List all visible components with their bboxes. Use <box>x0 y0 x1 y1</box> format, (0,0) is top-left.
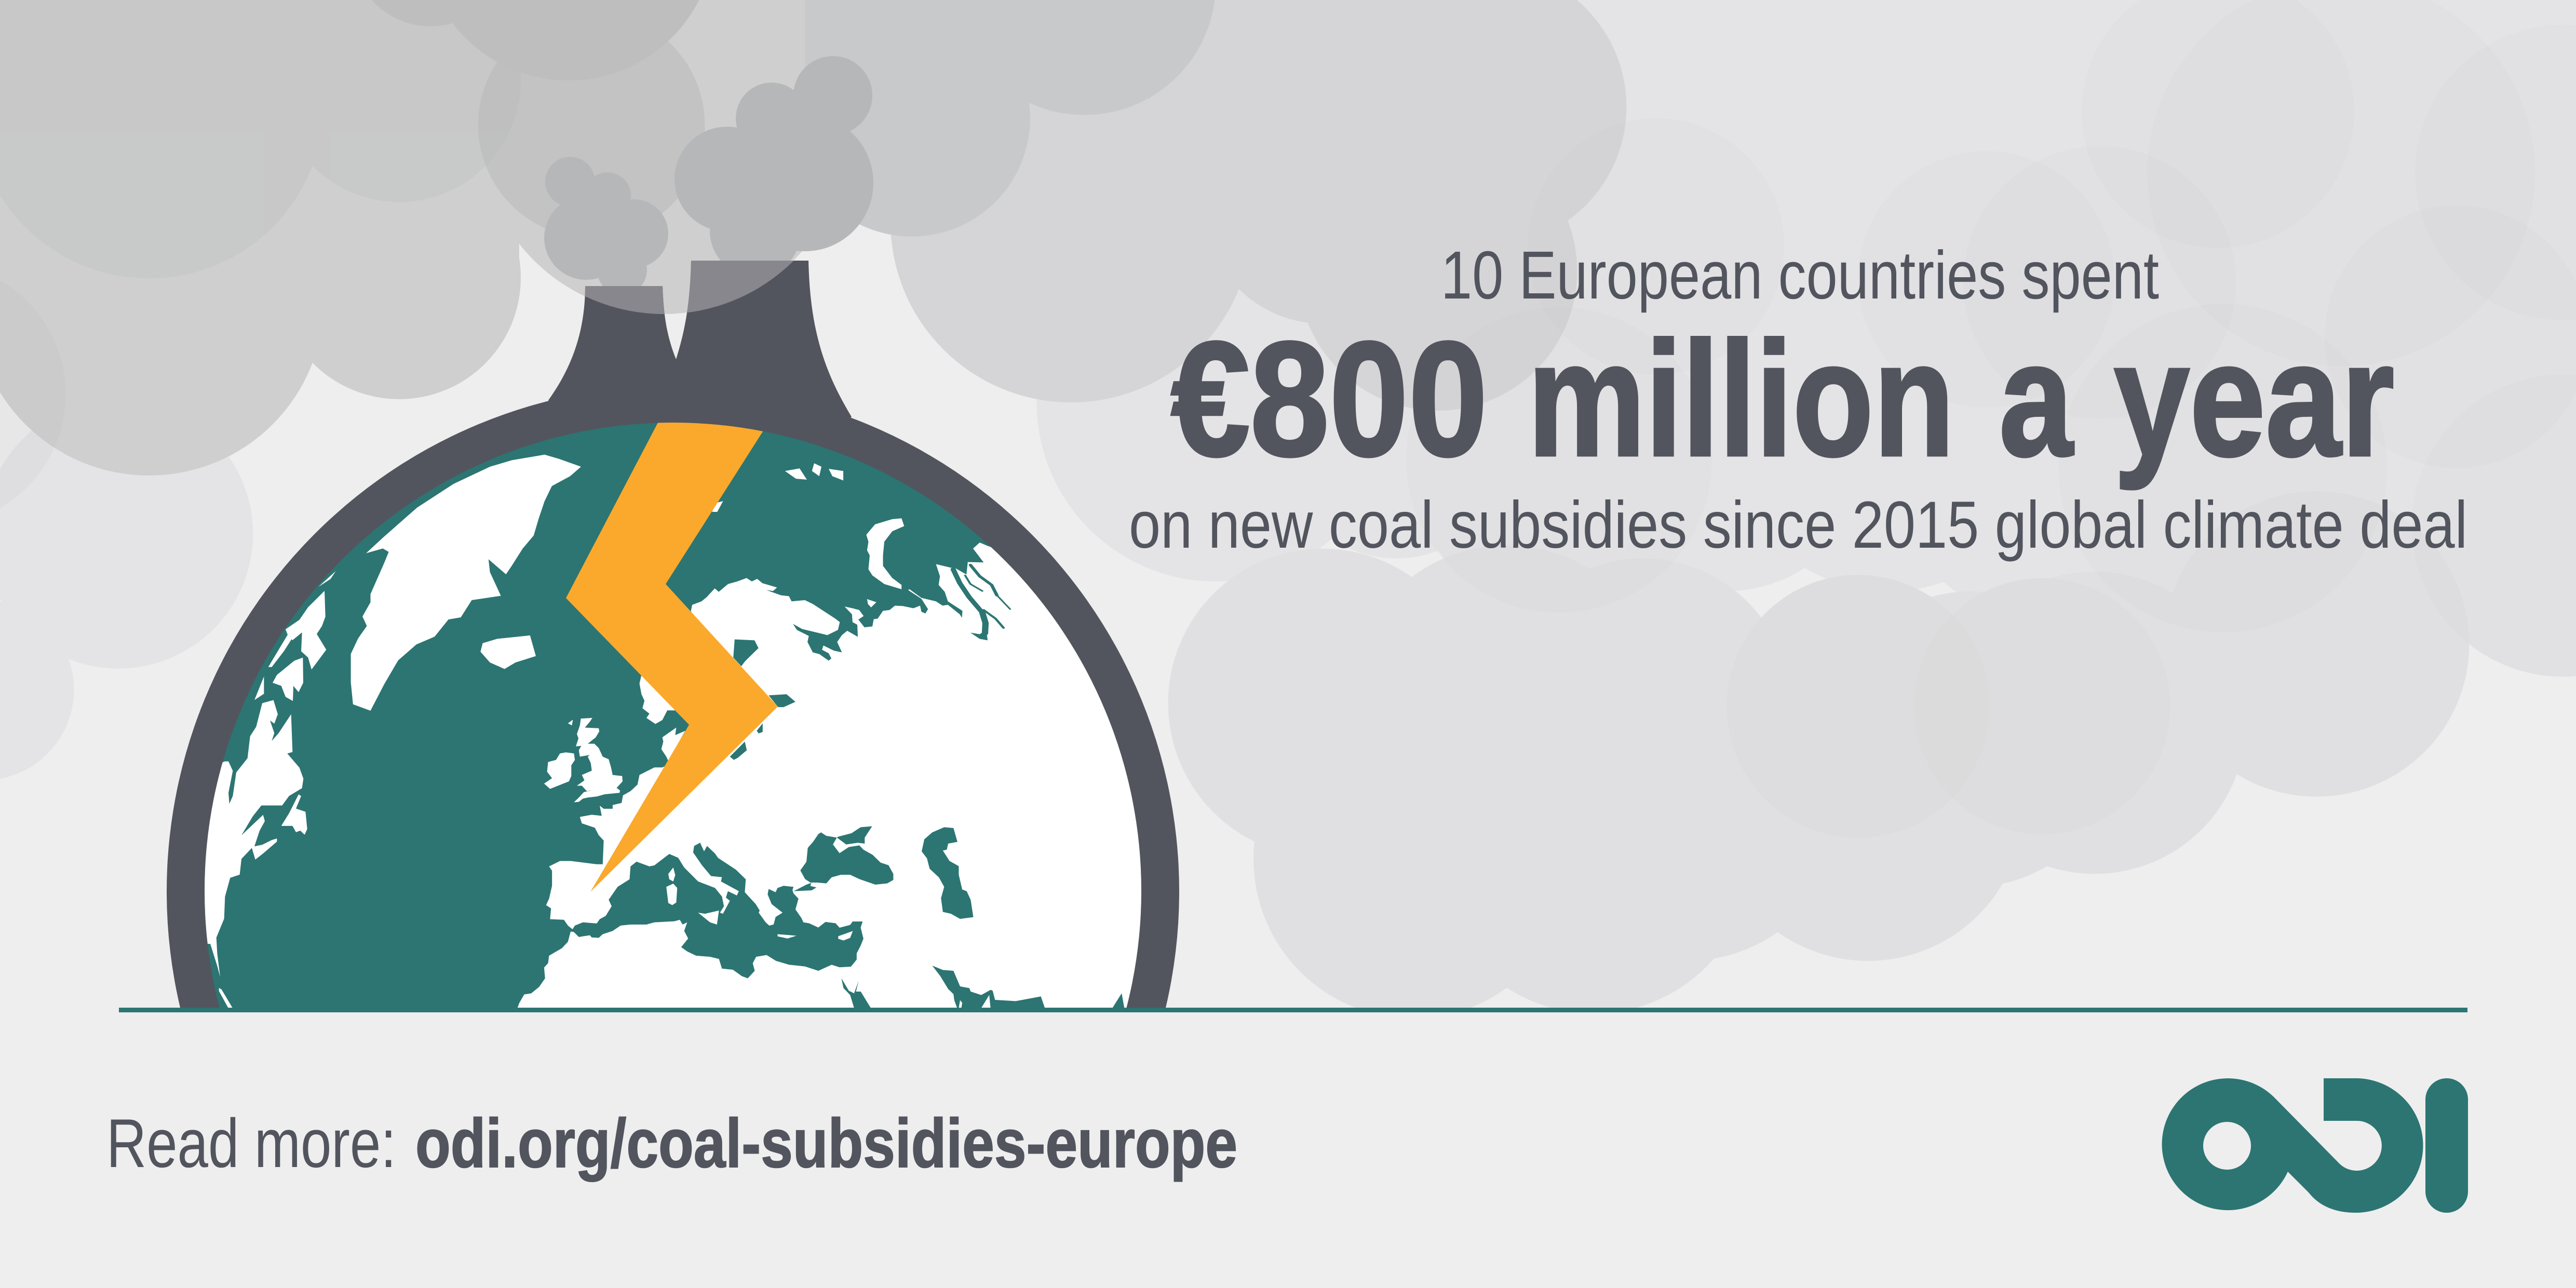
smoke puffs from chimneys <box>544 56 873 295</box>
western europe and africa <box>514 675 1076 1019</box>
pale cloud lower left <box>0 399 253 780</box>
upper left smoke cloud <box>0 0 521 278</box>
read more link text: odi.org/coal-subsidies-europe <box>415 1105 1237 1182</box>
northern eurasia <box>691 518 1258 1012</box>
lightning bolt crack <box>566 414 778 892</box>
baltic sea pieces <box>768 694 795 707</box>
ground line <box>119 1008 2467 1012</box>
mid grey chimney cloud lobe <box>478 42 705 228</box>
black sea, caspian sea, red sea and gulf <box>794 826 1124 1012</box>
top centre dark lobes <box>859 0 1215 237</box>
centre top cloud <box>887 0 1626 411</box>
lower left smoke cloud <box>0 0 805 476</box>
headline text block <box>1129 237 2467 562</box>
read more link text <box>106 1105 1237 1182</box>
line one: 10 European countries spent <box>1441 237 2159 313</box>
darkest top lobes <box>372 0 699 62</box>
headline figure: a <box>1999 308 2074 490</box>
headline figure: year <box>2114 308 2394 491</box>
mediterranean sea <box>571 843 864 978</box>
power station cooling towers and globe ring <box>167 261 1179 1008</box>
globe map <box>197 414 1258 1019</box>
siberian gulfs and rivers <box>953 565 1010 633</box>
mediterranean islands <box>666 867 797 939</box>
smoke clouds <box>0 0 2576 1019</box>
headline figure <box>1171 308 2394 491</box>
greenland and iceland <box>351 455 843 711</box>
british isles <box>574 718 623 802</box>
headline figure: €800 <box>1171 308 1488 490</box>
read more link text: Read more: <box>106 1105 396 1182</box>
faint overlapping cloud lobes <box>2148 155 2527 367</box>
ODI logo <box>2162 1078 2468 1213</box>
smoke veil across tower tops <box>548 261 852 467</box>
lower middle cloud <box>1168 549 2470 1008</box>
pale cloud upper right <box>1036 0 2576 677</box>
left edge lobe <box>0 263 66 525</box>
headline figure: million <box>1528 308 1954 490</box>
north america <box>199 571 336 1008</box>
